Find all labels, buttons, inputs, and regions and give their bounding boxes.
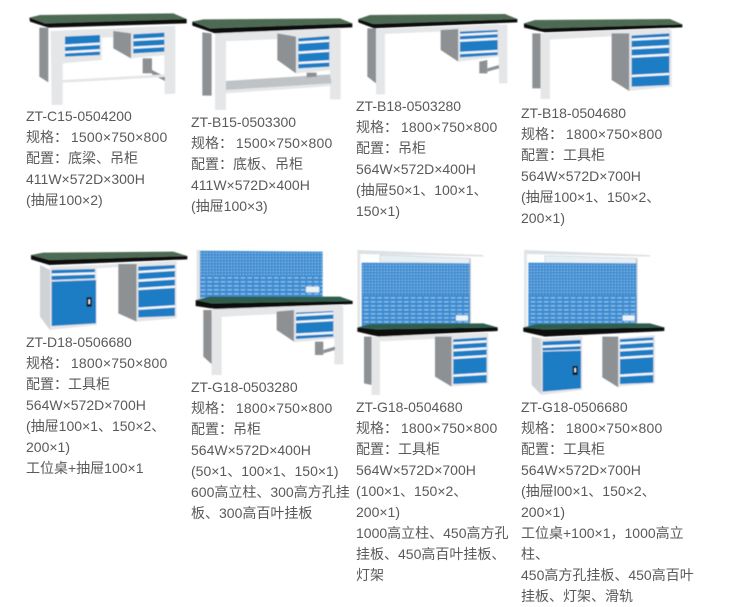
- text: ZT-B18-0504680: 规格： 1800×750×800: [521, 126, 663, 142]
- text: ZT-G18-0503280: ZT-G18-0503280: [191, 379, 298, 395]
- bench: ZT-G18-0503280: [196, 250, 353, 375]
- bench: ZT-B18-0504680: [524, 19, 682, 99]
- bench: ZT-C15-0504200: [29, 13, 187, 105]
- text: ZT-D18-0506680: 564W×572D×700H: [26, 397, 146, 413]
- text: ZT-G18-0503280: 规格： 1800×750×800: [191, 400, 333, 416]
- bench: ZT-D18-0506680: [31, 252, 187, 330]
- text: ZT-B18-0503280: 564W×572D×400H: [356, 161, 476, 177]
- text: ZT-G18-0504680: 1000高立柱、450高方孔: [356, 525, 509, 541]
- text: ZT-B18-0503280: ZT-B18-0503280: [356, 98, 461, 114]
- text: ZT-C15-0504200: 配置：底梁、吊柜: [26, 150, 138, 166]
- text: ZT-C15-0504200: 规格： 1500×750×800: [26, 129, 168, 145]
- text: ZT-B18-0504680: [521, 105, 663, 226]
- bench: ZT-B18-0503280: [358, 14, 517, 94]
- text: ZT-B18-0504680: (抽屉100×1、150×2、: [521, 189, 660, 205]
- text: ZT-G18-0503280: (50×1、100×1、150×1): [191, 463, 338, 479]
- text: ZT-G18-0504680: (100×1、150×2、: [356, 483, 467, 499]
- text: ZT-G18-0504680: [356, 399, 509, 583]
- text: ZT-G18-0506680: (抽屉l00×1、150×2、: [521, 483, 656, 499]
- text: ZT-G18-0503280: 564W×572D×400H: [191, 442, 311, 458]
- text: ZT-G18-0504680: 灯架: [356, 567, 384, 583]
- text: ZT-G18-0506680: 配置：工具柜: [521, 441, 605, 457]
- text: ZT-B18-0503280: (抽屉50×1、100×1、: [356, 182, 488, 198]
- icon: door handle: [573, 366, 578, 375]
- text: ZT-B15-0503300: 规格： 1500×750×800: [191, 135, 333, 151]
- text: ZT-G18-0506680: 柱、: [521, 546, 549, 562]
- text: ZT-D18-0506680: 工位桌+抽屉100×1: [26, 460, 144, 476]
- text: ZT-B18-0504680: ZT-B18-0504680: [521, 105, 626, 121]
- text: ZT-D18-0506680: (抽屉100×1、150×2、: [26, 418, 165, 434]
- text: ZT-G18-0504680: 挂板、450高百叶挂板、: [356, 546, 505, 562]
- text: ZT-G18-0506680: 564W×572D×700H: [521, 462, 641, 478]
- text: ZT-G18-0506680: ZT-G18-0506680: [521, 399, 628, 415]
- text: ZT-G18-0503280: 600高立柱、300高方孔挂: [191, 484, 350, 500]
- text: ZT-D18-0506680: ZT-D18-0506680: [26, 334, 132, 350]
- text: ZT-B15-0503300: 配置：底板、吊柜: [191, 156, 303, 172]
- text: ZT-D18-0506680: [26, 334, 168, 476]
- text: ZT-D18-0506680: 200×1): [26, 439, 70, 455]
- text: ZT-B15-0503300: 411W×572D×400H: [191, 177, 310, 193]
- text: ZT-B18-0504680: 配置：工具柜: [521, 147, 605, 163]
- text: ZT-B18-0503280: 150×1): [356, 203, 400, 219]
- text: ZT-G18-0506680: 规格： 1800×750×800: [521, 420, 663, 436]
- text: ZT-B15-0503300: ZT-B15-0503300: [191, 114, 296, 130]
- bench: ZT-G18-0504680: [357, 250, 498, 395]
- text: ZT-G18-0503280: [191, 379, 350, 521]
- text: ZT-G18-0504680: 配置：工具柜: [356, 441, 440, 457]
- text: ZT-G18-0504680: 564W×572D×700H: [356, 462, 476, 478]
- text: ZT-G18-0506680: 450高方孔挂板、450高百叶: [521, 567, 694, 583]
- text: ZT-D18-0506680: 规格： 1800×750×800: [26, 355, 168, 371]
- text: ZT-B18-0504680: 564W×572D×700H: [521, 168, 641, 184]
- text: ZT-G18-0506680: [521, 399, 694, 604]
- text: ZT-D18-0506680: 配置：工具柜: [26, 376, 110, 392]
- icon: door handle: [87, 297, 92, 307]
- text: ZT-G18-0506680: 200×1): [521, 504, 565, 520]
- text: ZT-G18-0504680: 200×1): [356, 504, 400, 520]
- text: ZT-B15-0503300: [191, 114, 333, 214]
- text: ZT-B18-0504680: 200×1): [521, 210, 565, 226]
- text: ZT-B18-0503280: 规格： 1800×750×800: [356, 119, 498, 135]
- text: ZT-G18-0504680: 规格： 1800×750×800: [356, 420, 498, 436]
- text: ZT-B15-0503300: (抽屉100×3): [191, 198, 268, 214]
- bench: ZT-G18-0506680: [523, 250, 664, 395]
- text: ZT-B18-0503280: 配置：吊柜: [356, 140, 426, 156]
- text: ZT-G18-0506680: 挂板、灯架、滑轨: [521, 588, 633, 604]
- text: ZT-B18-0503280: [356, 98, 498, 219]
- text: ZT-G18-0506680: 工位桌+100×1，1000高立: [521, 525, 684, 541]
- text: ZT-G18-0503280: 板、300高百叶挂板: [191, 505, 312, 521]
- text: ZT-G18-0504680: ZT-G18-0504680: [356, 399, 463, 415]
- text: ZT-G18-0503280: 配置：吊柜: [191, 421, 261, 437]
- bench: ZT-B15-0503300: [192, 18, 352, 110]
- text: ZT-C15-0504200: 411W×572D×300H: [26, 171, 145, 187]
- text: ZT-C15-0504200: (抽屉100×2): [26, 192, 103, 208]
- text: ZT-C15-0504200: [26, 108, 168, 208]
- text: ZT-C15-0504200: ZT-C15-0504200: [26, 108, 132, 124]
